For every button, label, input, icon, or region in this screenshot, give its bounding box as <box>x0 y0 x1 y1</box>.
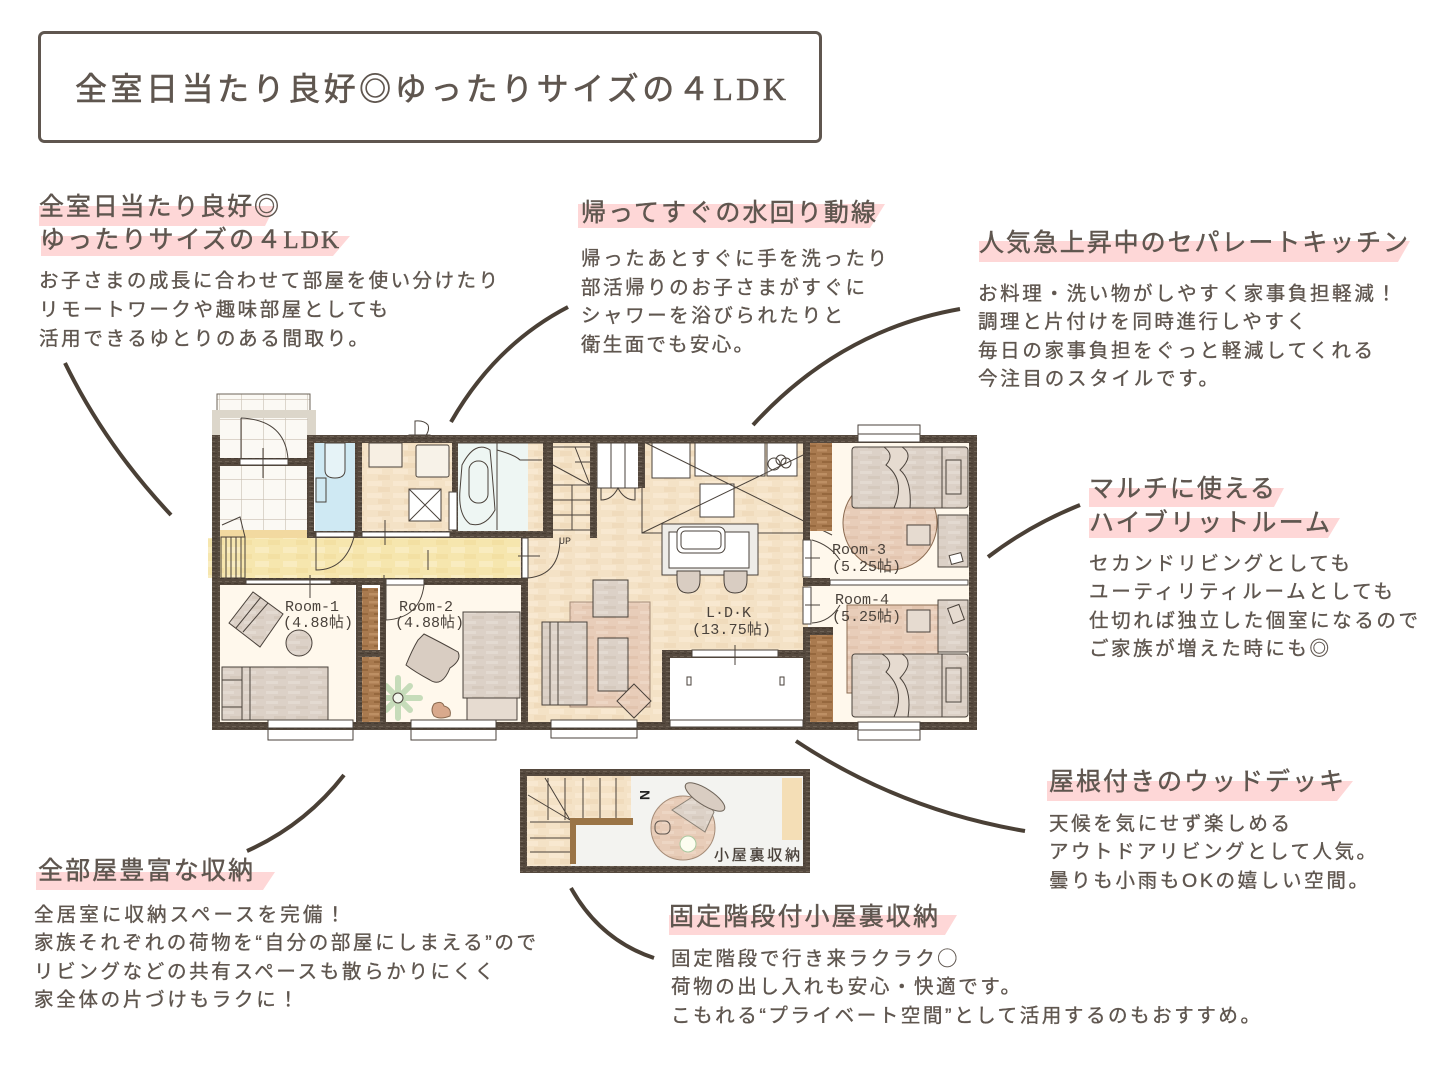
arrow: to closets <box>247 775 344 851</box>
windows and doors <box>240 418 968 740</box>
panel: hybrid room <box>1089 475 1418 660</box>
stairs: UP <box>559 537 571 548</box>
room labels: (5.25帖) <box>832 558 901 576</box>
panel: 4LDK summary <box>39 193 498 350</box>
stairs <box>221 443 591 578</box>
panel: hybrid room: セカンドリビングとしても <box>1089 553 1350 575</box>
panel: hybrid room: 仕切れば独立した個室になるので <box>1089 610 1418 632</box>
panel: attic storage: 固定階段付小屋裏収納 <box>669 903 938 931</box>
walls <box>212 435 977 730</box>
panel: hybrid room: ハイブリットルーム <box>1089 509 1330 537</box>
panel: storage: 家全体の片づけもラクに！ <box>34 989 298 1011</box>
panel: separate kitchen: 毎日の家事負担をぐっと軽減してくれる <box>978 340 1373 362</box>
north mark: N <box>637 790 653 800</box>
floors <box>208 394 970 723</box>
floor plan <box>208 394 977 740</box>
panel: storage: 家族それぞれの荷物を“自分の部屋にしまえる”ので <box>34 932 536 954</box>
panel: hybrid room: ご家族が増えた時にも◎ <box>1089 638 1329 660</box>
panel: 4LDK summary: リモートワークや趣味部屋としても <box>39 299 388 321</box>
arrow: to kitchen <box>753 309 960 425</box>
panel: separate kitchen: 今注目のスタイルです。 <box>978 368 1218 390</box>
panel: wood deck: 屋根付きのウッドデッキ <box>1049 768 1344 796</box>
room labels <box>283 542 901 639</box>
panel: wood deck: 天候を気にせず楽しめる <box>1049 813 1290 835</box>
room labels: Room-1 <box>285 599 339 616</box>
panel: separate kitchen <box>978 229 1410 390</box>
panel: hybrid room: マルチに使える <box>1089 475 1275 503</box>
furniture: room 4 <box>847 600 968 717</box>
attic floor plan <box>520 769 810 873</box>
panel: attic storage: 固定階段で行き来ラクラク◯ <box>671 948 957 970</box>
arrow: to attic <box>571 888 654 958</box>
panel: attic storage <box>669 903 1260 1027</box>
panel: water route: シャワーを浴びられたりと <box>581 305 843 327</box>
panel: storage: リビングなどの共有スペースも散らかりにくく <box>34 961 494 983</box>
panel: water route: 帰ったあとすぐに手を洗ったり <box>581 248 887 270</box>
panel: attic storage: 荷物の出し入れも安心・快適です。 <box>671 976 1020 998</box>
panel: wood deck <box>1047 768 1376 892</box>
room labels: Room-2 <box>399 599 453 616</box>
furniture: room 1 <box>222 592 328 720</box>
furniture: room 3 <box>843 447 968 570</box>
room labels: Room-4 <box>835 592 889 609</box>
panel: separate kitchen: 調理と片付けを同時進行しやすく <box>978 311 1306 333</box>
panel: 4LDK summary: ゆったりサイズの４LDK <box>40 226 339 254</box>
arrow: to entrance <box>65 363 171 515</box>
furniture: room 2 <box>380 612 520 720</box>
room labels: (13.75帖) <box>692 621 771 639</box>
panel: hybrid room: ユーティリティルームとしても <box>1089 581 1393 603</box>
room labels: Room-3 <box>832 542 886 559</box>
panel: wood deck: アウトドアリビングとして人気。 <box>1049 841 1376 863</box>
panel: attic storage: こもれる“プライベート空間”として活用するのもおすすめ。 <box>671 1005 1260 1027</box>
room labels: (5.25帖) <box>832 608 901 626</box>
room labels: (4.88帖) <box>395 614 464 632</box>
arrow: to deck <box>796 741 1025 831</box>
panel: water route <box>578 199 887 356</box>
title box <box>40 32 820 142</box>
panel: storage: 全部屋豊富な収納 <box>38 857 253 885</box>
panel: storage: 全居室に収納スペースを完備！ <box>34 904 345 926</box>
arrow: to washroom <box>451 307 568 422</box>
panel: wood deck: 曇りも小雨もOKの嬉しい空間。 <box>1049 870 1368 892</box>
furniture: LDK <box>542 441 832 718</box>
panel: water route: 部活帰りのお子さまがすぐに <box>581 277 865 299</box>
furniture: wet areas <box>316 421 543 530</box>
panel: 4LDK summary: お子さまの成長に合わせて部屋を使い分けたり <box>39 270 498 292</box>
panel: 4LDK summary: 活用できるゆとりのある間取り。 <box>39 328 368 350</box>
attic label: 小屋裏収納 <box>714 847 800 864</box>
room labels: L·D·K <box>706 605 751 622</box>
room labels: (4.88帖) <box>283 614 353 632</box>
title text: 全室日当たり良好◎ゆったりサイズの４LDK <box>75 71 786 107</box>
panel: water route: 衛生面でも安心。 <box>581 334 753 356</box>
panel: 4LDK summary: 全室日当たり良好◎ <box>39 193 279 221</box>
closets <box>356 443 833 722</box>
arrow: to hybrid room <box>988 505 1080 557</box>
panel: water route: 帰ってすぐの水回り動線 <box>581 199 876 227</box>
panel: storage <box>34 857 536 1011</box>
panel: separate kitchen: 人気急上昇中のセパレートキッチン <box>979 229 1408 257</box>
panel: separate kitchen: お料理・洗い物がしやすく家事負担軽減！ <box>978 283 1396 305</box>
